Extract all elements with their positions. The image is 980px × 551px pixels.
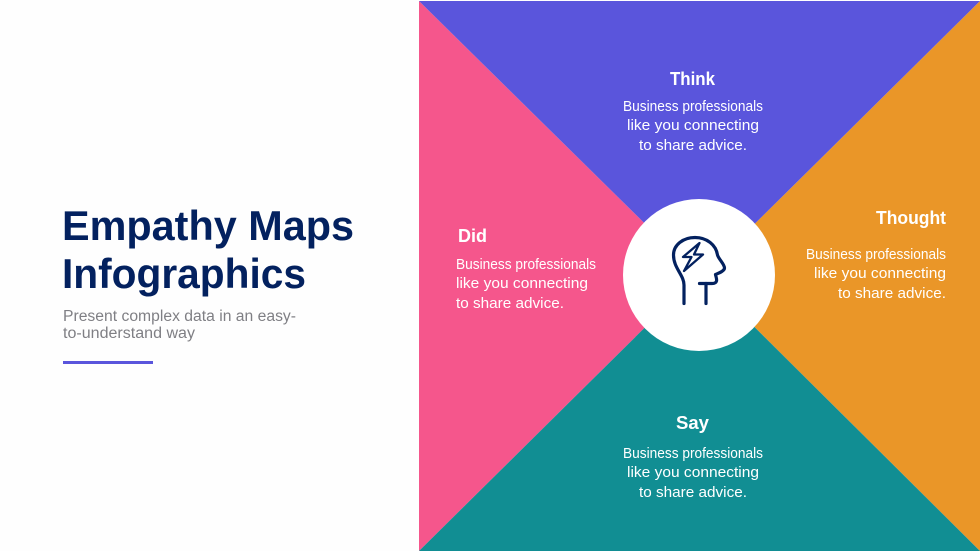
text: say: Say — [676, 412, 710, 433]
accent underline — [63, 361, 153, 364]
text: say — [623, 412, 763, 501]
text: think — [623, 68, 763, 154]
text: did: like you connecting — [456, 276, 588, 292]
text: thought: to share advice. — [838, 286, 946, 302]
text: did — [456, 225, 596, 312]
panel: think — [419, 1, 980, 278]
text: think: to share advice. — [639, 138, 747, 154]
text: thought — [806, 207, 946, 302]
icon: head with lightning bolt — [674, 238, 724, 304]
text: say: like you connecting — [627, 465, 759, 481]
text: did: Did — [458, 225, 487, 246]
panel: thought — [700, 1, 980, 551]
subtitle — [63, 308, 296, 342]
text: thought: Business professionals — [806, 247, 946, 263]
panel: did — [419, 1, 700, 551]
text: think: Business professionals — [623, 99, 763, 115]
title: Empathy Maps — [62, 202, 354, 249]
panel: say — [419, 273, 980, 551]
center circle — [623, 199, 775, 351]
text: think: Think — [670, 68, 716, 89]
text: thought: Thought — [876, 207, 946, 228]
subtitle: to-understand way — [63, 325, 195, 342]
text: did: Business professionals — [456, 257, 596, 273]
title: Infographics — [62, 250, 306, 297]
text: say: to share advice. — [639, 485, 747, 501]
subtitle: Present complex data in an easy- — [63, 308, 296, 325]
title — [62, 202, 354, 297]
text: say: Business professionals — [623, 446, 763, 462]
text: think: like you connecting — [627, 118, 759, 134]
text: did: to share advice. — [456, 296, 564, 312]
text: thought: like you connecting — [814, 266, 946, 282]
